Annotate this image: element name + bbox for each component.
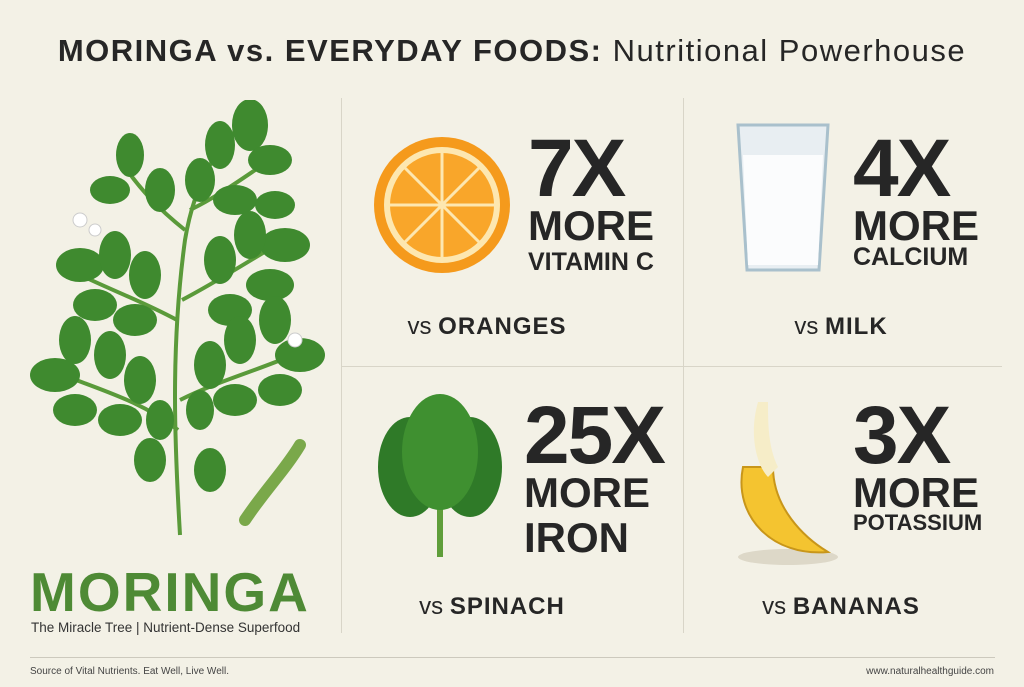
icon: glass of milk <box>736 124 830 272</box>
moringa subtitle: The Miracle Tree | Nutrient-Dense Superfood <box>31 620 300 635</box>
panel: spinach <box>378 390 666 620</box>
panel: oranges: vs ORANGES <box>407 313 567 340</box>
panel: milk: CALCIUM <box>853 243 968 271</box>
title: MORINGA vs. EVERYDAY FOODS: Nutritional Powerhouse <box>58 33 966 68</box>
panel: milk: vs MILK <box>794 313 888 340</box>
icon: orange <box>374 137 510 273</box>
panel: spinach: 25X <box>524 390 664 481</box>
panel: bananas: POTASSIUM <box>853 510 982 535</box>
moringa heading: MORINGA <box>30 561 310 623</box>
panel: bananas: MORE <box>853 469 979 516</box>
footer left: Source of Vital Nutrients. Eat Well, Live Well. <box>30 666 229 677</box>
panel: spinach: vs SPINACH <box>419 593 565 620</box>
panel: milk <box>736 123 979 340</box>
panel: oranges <box>374 123 654 340</box>
moringa illustration <box>30 100 325 536</box>
panel: spinach: IRON <box>524 514 629 561</box>
panel: milk: MORE <box>853 202 979 249</box>
icon: banana <box>738 402 838 565</box>
panel: bananas: vs BANANAS <box>762 593 920 620</box>
panel: oranges: MORE <box>528 202 654 249</box>
panel: bananas: 3X <box>853 390 949 481</box>
panel: milk: 4X <box>853 123 949 214</box>
panel: bananas <box>738 390 982 620</box>
icon: spinach <box>378 394 502 557</box>
panel: oranges: 7X <box>528 123 624 214</box>
panel: oranges: VITAMIN C <box>528 248 654 276</box>
footer right: www.naturalhealthguide.com <box>866 666 994 677</box>
panel: spinach: MORE <box>524 469 650 516</box>
